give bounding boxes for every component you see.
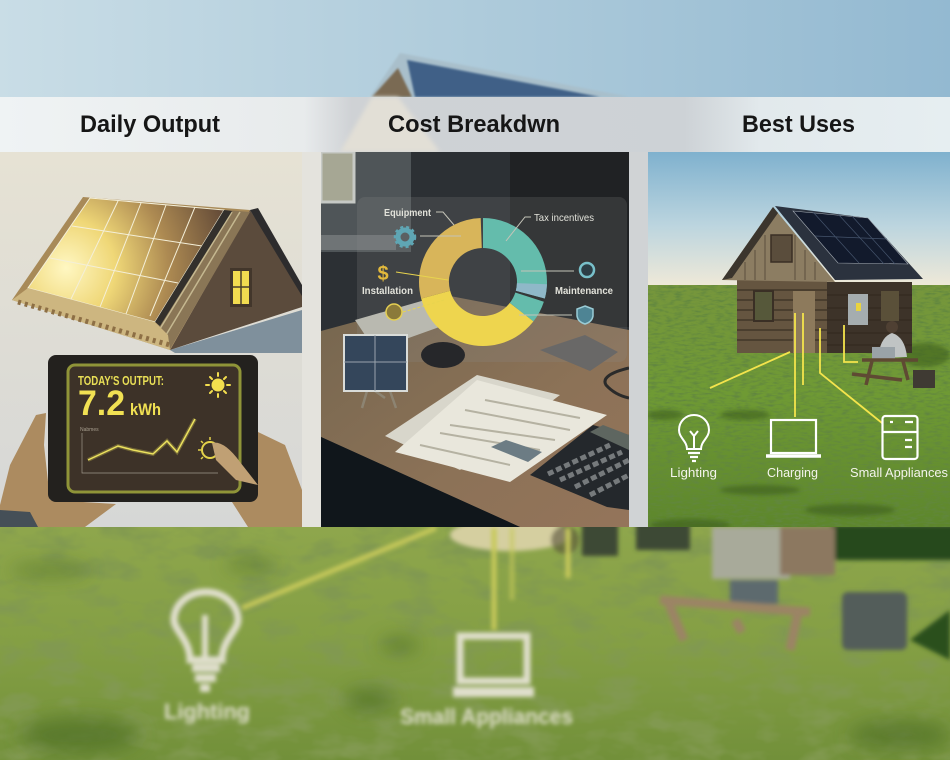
label: tax incentives: Tax incentives	[534, 212, 594, 224]
use: small appliances	[850, 416, 948, 480]
segment: maintenance	[510, 292, 544, 322]
door	[793, 291, 815, 353]
label: small appliances: Small Appliances	[850, 466, 948, 480]
blurred bulb icon	[174, 592, 238, 688]
heading: Best Uses: Best Uses	[742, 111, 855, 138]
labels	[362, 207, 613, 297]
tablet	[48, 355, 258, 502]
blurred person	[712, 527, 790, 579]
power lines	[710, 313, 882, 423]
blurred battery	[842, 592, 907, 650]
router	[540, 335, 618, 371]
tablet heading: TODAY'S OUTPUT:	[78, 374, 164, 388]
grass patches	[647, 343, 950, 531]
segment: highlight	[516, 283, 547, 298]
icon: laptop	[766, 420, 821, 456]
icon: coin	[386, 304, 402, 320]
chart label: Nabmes	[80, 427, 99, 433]
blurred label: small appliances: Small Appliances	[400, 704, 573, 729]
window lower	[754, 291, 773, 321]
panel: daily output	[0, 152, 302, 527]
label: maintenance: Maintenance	[555, 285, 613, 297]
icon: refresh	[580, 263, 594, 277]
log cabin	[722, 206, 923, 353]
icon: appliance	[882, 416, 918, 459]
meter box	[848, 294, 868, 325]
person at bench	[852, 321, 918, 385]
calculator	[530, 425, 629, 510]
blurred power lines	[242, 528, 568, 630]
side window	[881, 291, 899, 321]
blurred bench	[660, 600, 810, 650]
documents	[385, 375, 607, 482]
icon: touched sun	[198, 437, 216, 460]
blurred grass background	[0, 519, 950, 760]
blurred label: lighting: Lighting	[164, 699, 250, 724]
window upper	[771, 235, 792, 262]
glass overlay	[357, 197, 627, 362]
output value: 7.2	[78, 384, 125, 423]
icon: fingertip	[212, 443, 258, 485]
title band	[0, 97, 950, 152]
label: installation: Installation	[362, 285, 413, 297]
heading: Cost Breakdwn: Cost Breakdwn	[388, 111, 560, 138]
icon: right hand	[232, 432, 302, 527]
donut chart	[419, 218, 547, 346]
cable	[605, 368, 629, 398]
window	[321, 152, 354, 202]
heading: Daily Output: Daily Output	[80, 111, 220, 138]
use: lighting	[670, 415, 717, 480]
desk	[321, 296, 629, 527]
wall	[321, 152, 411, 252]
mouse	[421, 342, 465, 368]
label: equipment: Equipment	[384, 207, 431, 219]
ground shadow	[170, 310, 302, 353]
icon: shield	[577, 306, 593, 324]
white device	[355, 300, 438, 338]
leader lines	[396, 212, 574, 315]
blurred sky background	[0, 0, 950, 97]
panel: best uses	[647, 152, 950, 531]
label: charging: Charging	[767, 466, 818, 480]
icon: lit window	[230, 268, 252, 307]
icon: gear	[395, 227, 415, 247]
grass texture	[648, 285, 950, 527]
icon: left hand	[0, 413, 116, 527]
icon: dollar: $	[377, 263, 389, 285]
output unit: kWh	[130, 400, 161, 419]
icon: house with solar roof	[12, 197, 302, 350]
label: lighting: Lighting	[670, 466, 717, 480]
segment: installation	[421, 290, 534, 346]
blurred laptop icon	[453, 636, 534, 692]
segment: equipment	[419, 218, 482, 299]
gaps between panels	[302, 152, 648, 527]
icon: sun	[206, 373, 230, 397]
icon: bulb	[679, 415, 709, 461]
panel: cost breakdown	[321, 152, 629, 527]
battery	[913, 370, 935, 388]
mini solar panel	[344, 335, 407, 408]
use: charging	[766, 420, 821, 480]
segment: tax incentives	[483, 218, 547, 298]
solar array	[793, 211, 908, 264]
line chart	[82, 419, 218, 473]
